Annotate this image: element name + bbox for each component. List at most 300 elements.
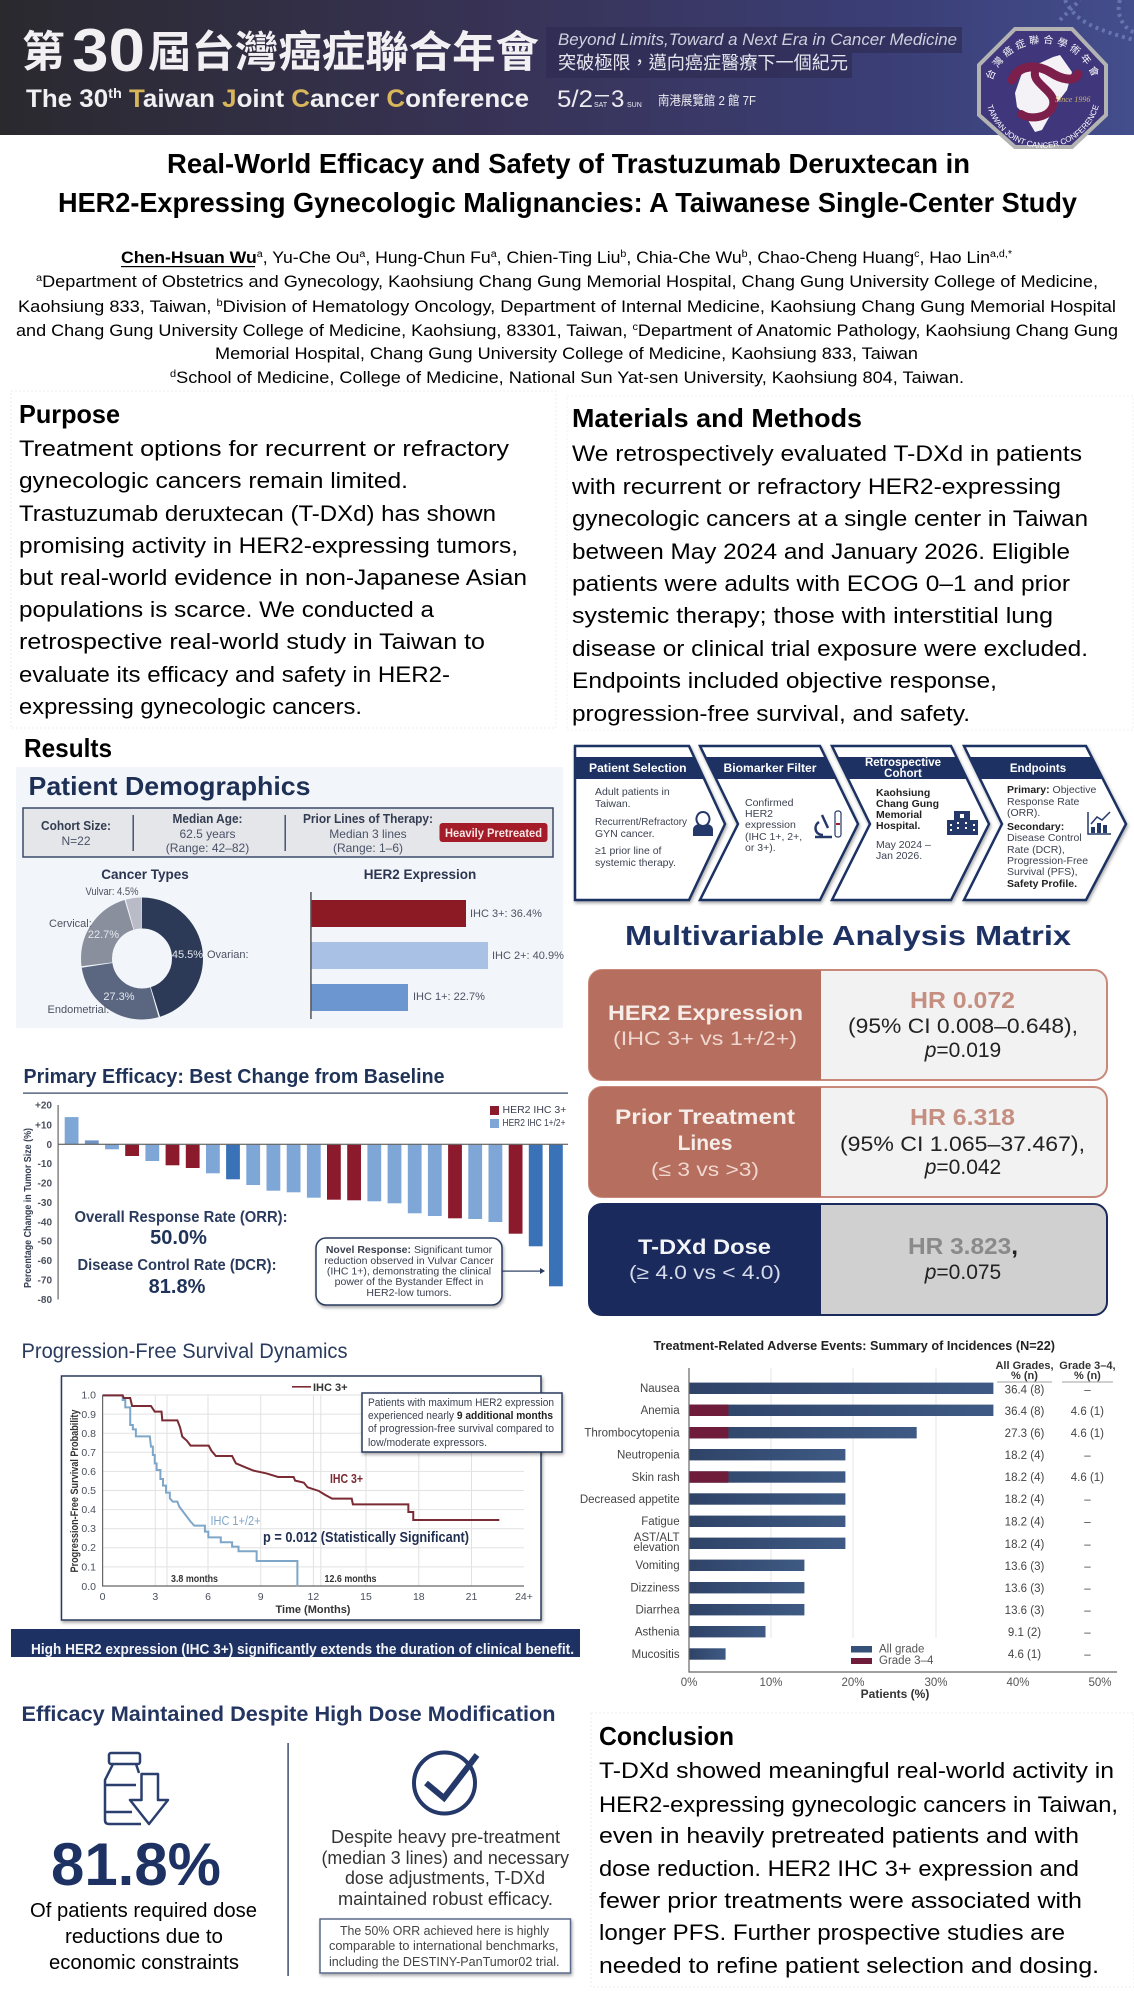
purpose body text: retrospective real-world study in Taiwan to	[19, 629, 485, 654]
icon: vial with down arrow	[105, 1753, 168, 1824]
purpose body text: but real-world evidence in non-Japanese Asian	[19, 565, 527, 590]
chevron: patient selection: systemic therapy.	[595, 857, 676, 869]
adverse events axes: 0%	[681, 1677, 697, 1689]
robust efficacy text: (median 3 lines) and necessary	[322, 1848, 569, 1868]
PFS axes: 24+	[515, 1591, 533, 1603]
adverse events axes: 20%	[841, 1677, 865, 1689]
chevron: endpoints: Safety Profile.	[1007, 878, 1077, 890]
conclusion body text: longer PFS. Further prospective studies are	[599, 1920, 1065, 1945]
incidence table: 9.1 (2)	[1008, 1627, 1041, 1639]
PFS takeaway banner: High HER2 expression (IHC 3+) significantly extends the duration of clinical benefit.	[31, 1641, 574, 1658]
methods body text: We retrospectively evaluated T-DXd in patients	[572, 441, 1082, 466]
bar chart: HER2 expression: IHC 3+: 36.4%	[470, 908, 542, 920]
waterfall axes: +10	[35, 1120, 52, 1132]
adverse event names: Fatigue	[641, 1516, 680, 1528]
row: prior treatment lines: (≤ 3 vs >3)	[651, 1160, 759, 1181]
adverse event names: Dizziness	[630, 1582, 680, 1594]
row: HER2 expression: HER2 Expression	[608, 1002, 803, 1025]
title	[58, 148, 1077, 218]
authors: c	[914, 249, 919, 260]
methods body text: disease or clinical trial exposure were excluded.	[572, 636, 1088, 661]
PFS labels: IHC 3+	[313, 1382, 348, 1394]
incidence table: 18.2 (4)	[1005, 1516, 1044, 1528]
conference name in Chinese: 屆台灣癌症聯合年會	[148, 18, 539, 80]
incidence table: –	[1084, 1561, 1091, 1573]
PFS axes: 0.0	[81, 1581, 96, 1593]
chevron: retrospective cohort: Hospital.	[876, 820, 920, 832]
incidence table: All Grades,	[995, 1360, 1054, 1372]
demographics heading: Patient Demographics	[28, 771, 310, 801]
robust efficacy text: Despite heavy pre-treatment	[331, 1827, 560, 1847]
methods body text: systemic therapy; those with interstitial lung	[572, 603, 1053, 628]
affiliations	[16, 273, 1118, 387]
PFS takeaway banner	[11, 1629, 580, 1658]
summary stats box: 62.5 years	[179, 827, 236, 841]
waterfall legend	[490, 1104, 566, 1129]
waterfall axes: Percentage Change in Tumor Size (%)	[22, 1128, 34, 1288]
chevron: retrospective cohort: Retrospective	[865, 757, 941, 769]
row: prior treatment lines: HR 6.318	[910, 1104, 1015, 1130]
incidence table: –	[1084, 1450, 1091, 1462]
donut chart: cancer types: 45.5%	[172, 949, 203, 961]
conclusion body text: HER2-expressing gynecologic cancers in Taiwan,	[599, 1792, 1118, 1817]
methods body text: progression-free survival, and safety.	[572, 701, 970, 726]
benchmark note box: including the DESTINY-PanTumor02 trial.	[329, 1955, 560, 1969]
chevron: endpoints: Endpoints	[1010, 763, 1066, 775]
purpose body text: Trastuzumab deruxtecan (T-DXd) has shown	[19, 501, 496, 526]
heading: materials and methods: Materials and Methods	[572, 403, 862, 433]
chevron: biomarker filter: Biomarker Filter	[724, 763, 817, 775]
conference name in Chinese	[22, 17, 539, 84]
PFS axes: Time (Months)	[276, 1604, 351, 1616]
PFS axes: 15	[360, 1591, 372, 1603]
incidence table: 4.6 (1)	[1071, 1472, 1104, 1484]
conference name in English: The 30	[26, 85, 105, 113]
response rates: Disease Control Rate (DCR):	[78, 1257, 276, 1274]
methods body text: patients were adults with ECOG 0–1 and prior	[572, 571, 1071, 596]
adverse event names: Decreased appetite	[580, 1494, 680, 1506]
PFS gridlines	[103, 1395, 524, 1586]
chevron: patient selection: Taiwan.	[595, 798, 631, 810]
adverse events axes: 50%	[1088, 1677, 1112, 1689]
logo: Taiwan Joint Cancer Conference: 台灣癌症聯合學術年會	[986, 34, 1098, 80]
dose reduction caption	[30, 1900, 257, 1974]
badge: heavily pretreated: Heavily Pretreated	[445, 826, 542, 840]
slogan: 突破極限，邁向癌症醫療下一個紀元	[558, 53, 848, 73]
response rates: 50.0%	[150, 1227, 207, 1249]
chevron: retrospective cohort: Kaohsiung	[876, 787, 930, 799]
callout: novel response: HER2-low tumors.	[366, 1287, 452, 1299]
PFS axes: 3	[152, 1591, 158, 1603]
icon: doctor	[693, 812, 713, 836]
affiliations: Kaohsiung 833, Taiwan,	[18, 298, 193, 316]
logo: Taiwan Joint Cancer Conference	[977, 27, 1108, 149]
summary stats box: Cohort Size:	[41, 818, 111, 833]
chevron: retrospective cohort: Cohort	[884, 768, 922, 780]
panel: purpose	[11, 391, 556, 728]
summary stats box	[23, 808, 553, 857]
chevron: retrospective cohort	[832, 746, 989, 900]
waterfall axes: -40	[38, 1218, 52, 1228]
title: HER2-Expressing Gynecologic Malignancies: A Taiwanese Single-Center Study	[58, 187, 1077, 218]
chevron: endpoints: Primary: Objective	[1007, 784, 1096, 796]
icon: growth chart	[1088, 812, 1111, 834]
row: prior treatment lines: (95% CI 1.065–37.467),	[840, 1133, 1085, 1156]
summary stats box: Median Age:	[172, 811, 242, 826]
PFS labels: 3.8 months	[171, 1574, 218, 1585]
incidence table: 13.6 (3)	[1005, 1583, 1044, 1595]
authors: a	[491, 249, 497, 260]
authors: , Chia-Che Wu	[626, 249, 742, 267]
conclusion body text: dose reduction. HER2 IHC 3+ expression and	[599, 1856, 1079, 1881]
date and venue: SAT	[594, 102, 608, 109]
PFS labels: 12.6 months	[324, 1574, 377, 1585]
adverse events legend: Grade 3–4	[879, 1655, 934, 1667]
incidence table	[995, 1360, 1116, 1661]
row: HER2 expression: (95% CI 0.008–0.648),	[848, 1015, 1078, 1038]
PFS labels: IHC 1+/2+	[210, 1514, 260, 1528]
dose modification heading: Efficacy Maintained Despite High Dose Modification	[22, 1702, 556, 1726]
row: T-DXd dose: (≥ 4.0 vs < 4.0)	[629, 1263, 781, 1284]
authors: b	[742, 249, 748, 260]
authors: , Chien-Ting Liu	[497, 249, 620, 267]
chevron: biomarker filter: or 3+).	[745, 842, 776, 854]
adverse events axes: 10%	[759, 1677, 783, 1689]
chevron: endpoints: Response Rate	[1007, 796, 1080, 808]
donut chart: cancer types: Cervical:	[49, 918, 92, 930]
adverse event names: Anemia	[641, 1405, 680, 1417]
PFS axes: 0.2	[81, 1542, 96, 1554]
PFS callout: of progression-free survival compared to	[368, 1423, 554, 1435]
badge: heavily pretreated	[440, 823, 548, 842]
chevron: biomarker filter: (IHC 1+, 2+,	[745, 831, 802, 843]
bar chart: HER2 expression: IHC 1+: 22.7%	[413, 991, 485, 1003]
dose reduction caption: economic constraints	[49, 1952, 239, 1974]
row: HER2 expression: p=0.019	[924, 1039, 1001, 1062]
incidence table: –	[1084, 1516, 1091, 1528]
affiliations: d	[170, 369, 176, 380]
affiliations: and Chang Gung University College of Medicine, Kaohsiung, 83301, Taiwan,	[16, 322, 575, 340]
chevron: retrospective cohort: Memorial	[876, 809, 922, 821]
PFS callout: low/moderate expressors.	[368, 1437, 487, 1449]
PFS axes: 0.3	[81, 1523, 96, 1535]
PFS labels: IHC 3+	[330, 1471, 363, 1486]
chevron: endpoints: Survival (PFS),	[1007, 866, 1078, 878]
PFS callout: Patients with maximum HER2 expression	[368, 1397, 554, 1409]
title: Real-World Efficacy and Safety of Trastuzumab Deruxtecan in	[167, 148, 970, 179]
methods body text: with recurrent or refractory HER2-expressing	[571, 474, 1061, 499]
authors: Chen-Hsuan Wu	[121, 249, 257, 267]
bar chart: HER2 expression: HER2 Expression	[364, 867, 476, 882]
waterfall axes: -80	[38, 1295, 52, 1306]
adverse events axes	[681, 1368, 1117, 1701]
response rates: 81.8%	[149, 1276, 206, 1298]
incidence table: 18.2 (4)	[1005, 1539, 1044, 1551]
affiliations: c	[632, 322, 638, 333]
PFS axes: 18	[413, 1591, 425, 1603]
chevron: patient selection: ≥1 prior line of	[595, 845, 662, 857]
purpose body text: promising activity in HER2-expressing tumors,	[19, 533, 518, 558]
callout: novel response: Novel Response: Significant tumor	[326, 1244, 493, 1256]
date and venue: 南港展覽館 2 館 7F	[658, 93, 756, 108]
incidence table: 13.6 (3)	[1005, 1605, 1044, 1617]
adverse events heading: Treatment-Related Adverse Events: Summary of Incidences (N=22)	[654, 1338, 1055, 1353]
purpose body text	[19, 436, 527, 719]
callout: novel response: power of the Bystander Effect in	[335, 1276, 483, 1288]
summary stats box: Median 3 lines	[329, 827, 407, 841]
adverse event names	[580, 1383, 680, 1661]
panel: conclusion	[591, 1713, 1134, 1987]
logo: Taiwan Joint Cancer Conference: TAIWAN JOINT CANCER CONFERENCE	[988, 104, 1099, 148]
summary stats box: (Range: 1–6)	[333, 841, 403, 855]
PFS axes: 0.1	[81, 1562, 96, 1574]
incidence table: 27.3 (6)	[1005, 1428, 1044, 1440]
adverse events axes: 30%	[924, 1677, 948, 1689]
chevron: biomarker filter: HER2	[745, 808, 773, 820]
adverse event names: Diarrhea	[635, 1604, 680, 1616]
donut chart: cancer types: Ovarian:	[207, 949, 249, 961]
dose reduction caption: Of patients required dose	[30, 1900, 257, 1922]
incidence table: 18.2 (4)	[1005, 1472, 1044, 1484]
all grade bars	[689, 1383, 993, 1660]
incidence table: 13.6 (3)	[1005, 1561, 1044, 1573]
PFS axes	[69, 1390, 533, 1616]
conference name in Chinese: 第	[22, 18, 65, 80]
incidence table: –	[1084, 1539, 1091, 1551]
authors	[121, 249, 1012, 267]
adverse event names: AST/ALT	[634, 1532, 680, 1544]
adverse event names: Thrombocytopenia	[584, 1428, 680, 1440]
heading: results: Results	[24, 733, 112, 763]
callout: novel response	[316, 1238, 502, 1305]
row: T-DXd dose: T-DXd Dose	[638, 1236, 771, 1259]
summary stats box: (Range: 42–82)	[166, 841, 249, 855]
authors: a,d,*	[990, 249, 1012, 260]
incidence table: % (n)	[1011, 1370, 1038, 1382]
icon: check in circle	[414, 1752, 477, 1814]
PFS curves	[103, 1395, 499, 1586]
chevron: patient selection: GYN cancer.	[595, 828, 655, 840]
PFS axes: 0.9	[81, 1409, 96, 1421]
icon: microscope and test tube	[815, 811, 841, 837]
callout: novel response: (IHC 1+), demonstrating the clinical	[327, 1266, 491, 1278]
purpose body text: expressing gynecologic cancers.	[19, 694, 362, 719]
PFS axes: 12	[308, 1591, 319, 1603]
conference header banner	[0, 0, 1134, 149]
waterfall axes: -70	[38, 1276, 52, 1286]
chevron: endpoints: Disease Control	[1007, 832, 1082, 844]
incidence table: –	[1084, 1605, 1091, 1617]
conclusion body text: needed to refine patient selection and dosing.	[599, 1953, 1099, 1978]
incidence table: –	[1084, 1627, 1091, 1639]
matrix heading: Multivariable Analysis Matrix	[625, 920, 1072, 951]
methods body text	[571, 441, 1088, 726]
robust efficacy text: maintained robust efficacy.	[338, 1889, 553, 1909]
adverse event names: Vomiting	[635, 1560, 680, 1572]
incidence table: 4.6 (1)	[1071, 1406, 1104, 1418]
waterfall axes: 0	[46, 1140, 52, 1151]
affiliations: School of Medicine, College of Medicine, National Sun Yat-sen University, Kaohsiung 804, Taiwan.	[176, 369, 964, 387]
row: HER2 expression: HR 0.072	[910, 987, 1015, 1013]
robust efficacy text	[322, 1827, 569, 1909]
summary stats box: Prior Lines of Therapy:	[303, 811, 433, 826]
date and venue: SUN	[627, 102, 642, 109]
chevron: endpoints	[964, 746, 1126, 900]
incidence table: 36.4 (8)	[1005, 1406, 1044, 1418]
conference name in English: Taiwan Joint Cancer Conference	[129, 85, 525, 113]
waterfall bars	[65, 1117, 563, 1286]
chevron: retrospective cohort: Jan 2026.	[876, 850, 922, 862]
purpose body text: populations is scarce. We conducted a	[19, 597, 435, 622]
adverse events axes: 40%	[1006, 1677, 1030, 1689]
waterfall axes: +20	[35, 1100, 52, 1112]
incidence table: –	[1084, 1384, 1091, 1396]
adverse event names: Mucositis	[632, 1649, 680, 1661]
response rates	[74, 1209, 288, 1298]
chart: treatment-related adverse events	[580, 1338, 1117, 1701]
affiliations: a	[36, 273, 43, 284]
authors: a	[359, 249, 366, 260]
logo: Taiwan Joint Cancer Conference: Since 1996	[1055, 95, 1090, 104]
adverse event names: Neutropenia	[617, 1450, 680, 1462]
heading: purpose: Purpose	[19, 399, 120, 429]
authors: , Hao Lin	[919, 249, 990, 267]
chevron: biomarker filter: expression	[745, 819, 796, 831]
conclusion body text	[599, 1758, 1118, 1978]
affiliations: Division of Hematology Oncology, Department of Internal Medicine, Kaohsiung Chang Gung Memorial Hospital	[223, 298, 1116, 316]
benchmark note box: comparable to international benchmarks,	[329, 1939, 558, 1953]
incidence table: 4.6 (1)	[1071, 1428, 1104, 1440]
incidence table: –	[1084, 1583, 1091, 1595]
adverse event names: Asthenia	[635, 1626, 680, 1638]
donut chart: cancer types: 27.3%	[103, 991, 135, 1003]
PFS axes: 0.6	[81, 1466, 96, 1478]
chevron: biomarker filter	[700, 746, 858, 900]
PFS axes: 6	[205, 1591, 211, 1603]
chevron: patient selection: Patient Selection	[589, 763, 686, 775]
panel: patient demographics	[16, 767, 564, 1028]
chevron: retrospective cohort: May 2024 –	[876, 839, 931, 851]
chevron: endpoints: (ORR).	[1007, 807, 1040, 819]
row: T-DXd dose: HR 3.823 ,	[908, 1233, 1018, 1259]
PFS callout	[362, 1393, 562, 1452]
date and venue: 3	[611, 86, 624, 113]
donut chart: cancer types: 22.7%	[88, 929, 119, 941]
incidence table: 36.4 (8)	[1005, 1384, 1044, 1396]
slogan	[558, 30, 957, 73]
row: prior treatment lines: p=0.042	[924, 1156, 1001, 1179]
methods body text: between May 2024 and January 2026. Eligible	[572, 539, 1070, 564]
PFS heading: Progression-Free Survival Dynamics	[22, 1339, 348, 1363]
affiliations: b	[217, 298, 223, 309]
row: T-DXd dose: p=0.075	[924, 1261, 1001, 1284]
chevron: patient selection: Adult patients in	[595, 786, 670, 798]
chart: waterfall best change from baseline	[22, 1065, 568, 1306]
incidence table: 18.2 (4)	[1005, 1450, 1044, 1462]
PFS labels: p = 0.012 (Statistically Significant)	[263, 1529, 469, 1546]
callout: novel response: reduction observed in Vulvar Cancer	[324, 1255, 494, 1267]
incidence table: –	[1084, 1494, 1091, 1506]
PFS axes: 9	[258, 1591, 264, 1603]
slogan: Beyond Limits,Toward a Next Era in Cancer Medicine	[558, 30, 957, 49]
row: prior treatment lines: Lines	[678, 1132, 732, 1155]
PFS axes: Progression-Free Survival Probability	[69, 1409, 81, 1572]
bar chart: HER2 expression	[310, 867, 564, 1019]
chevron: biomarker filter: Confirmed	[745, 797, 794, 809]
PFS labels	[171, 1382, 469, 1585]
bar chart: HER2 expression: IHC 2+: 40.9%	[492, 950, 564, 962]
row: HER2 expression: (IHC 3+ vs 1+/2+)	[613, 1029, 797, 1050]
incidence table: Grade 3–4,	[1059, 1360, 1116, 1372]
donut chart: cancer types: Endometrial:	[48, 1004, 109, 1016]
PFS axes: 21	[466, 1591, 477, 1603]
purpose body text: gynecologic cancers remain limited.	[19, 468, 408, 493]
stat: 81.8%: 81.8%	[51, 1831, 221, 1898]
donut chart: cancer types: Vulvar: 4.5%	[86, 886, 139, 898]
conference name in English: th	[108, 85, 122, 101]
authors: , Yu-Che Ou	[263, 249, 359, 267]
adverse events legend	[851, 1644, 934, 1667]
process flow: study design chevrons	[575, 746, 1126, 900]
row: prior treatment lines	[589, 1087, 1107, 1197]
summary stats box: N=22	[61, 834, 91, 848]
affiliations: Department of Anatomic Pathology, Kaohsiung Chang Gung	[638, 322, 1118, 340]
authors: , Hung-Chun Fu	[365, 249, 491, 267]
waterfall axes: -20	[38, 1178, 52, 1190]
panel: efficacy maintained despite dose modification	[22, 1702, 570, 1976]
heading: conclusion: Conclusion	[599, 1721, 734, 1751]
methods body text: gynecologic cancers at a single center in Taiwan	[572, 506, 1088, 531]
icon: hospital	[947, 811, 978, 835]
incidence table: % (n)	[1074, 1370, 1101, 1382]
waterfall axes: -50	[38, 1236, 52, 1248]
adverse event names: Nausea	[640, 1383, 680, 1395]
panel: multivariable analysis matrix	[589, 920, 1107, 1315]
PFS axes: 0	[100, 1591, 106, 1603]
PFS axes: 0.4	[81, 1504, 96, 1516]
waterfall axes: -60	[38, 1256, 52, 1267]
conference name in Chinese: 30	[72, 17, 145, 84]
waterfall legend: HER2 IHC 3+	[502, 1104, 566, 1116]
donut chart: cancer types	[48, 867, 249, 1016]
incidence table: 18.2 (4)	[1005, 1494, 1044, 1506]
PFS axes: 0.5	[81, 1485, 96, 1497]
PFS axes: 1.0	[81, 1390, 96, 1402]
robust efficacy text: dose adjustments, T-DXd	[345, 1868, 545, 1888]
methods body text: Endpoints included objective response,	[572, 668, 997, 693]
adverse events axes: Patients (%)	[861, 1687, 929, 1701]
date and venue	[557, 86, 756, 113]
chevron: patient selection	[575, 746, 725, 900]
authors: , Chao-Cheng Huang	[748, 249, 914, 267]
row: T-DXd dose	[589, 1204, 1107, 1315]
purpose body text: Treatment options for recurrent or refractory	[19, 436, 510, 461]
grade 3-4 bars	[689, 1405, 728, 1483]
waterfall axes: -30	[38, 1198, 52, 1209]
panel: materials and methods	[567, 396, 1133, 730]
conclusion body text: T-DXd showed meaningful real-world activity in	[599, 1758, 1114, 1783]
conclusion body text: even in heavily pretreated patients and with	[599, 1823, 1079, 1848]
row: prior treatment lines: Prior Treatment	[615, 1106, 795, 1129]
purpose body text: evaluate its efficacy and safety in HER2-	[19, 662, 450, 687]
chevron: endpoints: Secondary:	[1007, 821, 1064, 833]
adverse event names: Skin rash	[632, 1472, 680, 1484]
incidence table: 4.6 (1)	[1008, 1649, 1041, 1661]
benchmark note box: The 50% ORR achieved here is highly	[340, 1924, 550, 1938]
incidence table: –	[1084, 1649, 1091, 1661]
waterfall heading: Primary Efficacy: Best Change from Baseline	[24, 1065, 444, 1088]
chevron: retrospective cohort: Chang Gung	[876, 798, 939, 810]
